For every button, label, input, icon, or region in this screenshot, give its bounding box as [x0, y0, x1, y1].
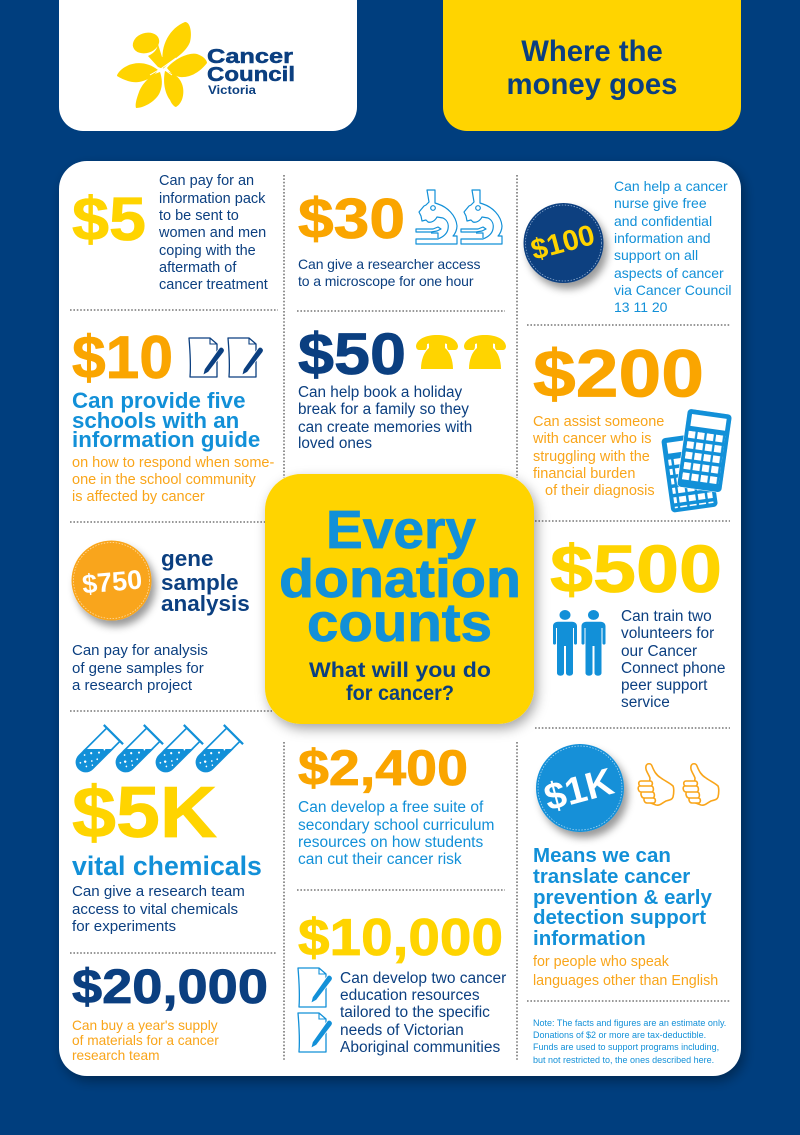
- icon: test tubes: [69, 725, 243, 779]
- block: $2,400: $2,400: [298, 740, 468, 796]
- block: $750: [72, 540, 250, 694]
- title: money goes: [507, 68, 677, 101]
- panel: header title: [443, 0, 741, 131]
- block: $500: volunteers for: [621, 625, 714, 642]
- panel: logo: [59, 0, 357, 131]
- panel: every donation counts: What will you do: [309, 659, 491, 682]
- block: $50: can create memories with: [298, 419, 472, 436]
- block: $5: information pack: [159, 191, 266, 207]
- block: $5: coping with the: [159, 243, 256, 259]
- block: $1K: for people who speak: [533, 954, 670, 970]
- block: $20,000: Can buy a year's supply: [72, 1018, 218, 1033]
- panel: every donation counts: [265, 474, 534, 724]
- block: $200: with cancer who is: [532, 431, 651, 447]
- note: Note: The facts and figures are an estimate only.: [533, 1018, 726, 1028]
- block: $2,400: can cut their cancer risk: [298, 851, 462, 868]
- block: $20,000: of materials for a cancer: [72, 1033, 219, 1048]
- block: $500: Connect phone: [621, 660, 725, 677]
- block: $5K: $5K: [72, 773, 217, 853]
- block: $750: Can pay for analysis: [72, 642, 208, 659]
- block: $1K: $1K: [540, 761, 619, 820]
- block: $5K: access to vital chemicals: [72, 901, 238, 918]
- block: $50: [298, 322, 506, 452]
- block: $10,000: $10,000: [298, 909, 503, 967]
- note: Funds are used to support programs including,: [533, 1042, 719, 1052]
- block: $200: of their diagnosis: [545, 483, 655, 499]
- panel: every donation counts: for cancer?: [346, 682, 454, 705]
- block: $30: $30: [298, 187, 405, 251]
- block: $10: Can provide five: [72, 388, 245, 413]
- block: $100: via Cancer Council: [614, 282, 732, 298]
- title: Where the: [521, 35, 663, 68]
- block: $500: Can train two: [621, 608, 712, 625]
- icon: daffodil: [117, 22, 207, 108]
- block: $100: support on all: [614, 247, 698, 263]
- block: $1K: detection support: [533, 906, 706, 929]
- block: $750: sample: [161, 570, 239, 595]
- block: $200: struggling with the: [533, 449, 650, 465]
- block: $5K: vital chemicals: [72, 851, 262, 881]
- block: $500: our Cancer: [621, 643, 697, 660]
- note: Donations of $2 or more are tax-deductible.: [533, 1030, 706, 1040]
- block: $100: aspects of cancer: [614, 265, 724, 281]
- block: $10,000: Aboriginal communities: [340, 1039, 500, 1056]
- block: $200: financial burden: [533, 466, 635, 482]
- icon: calculators: [661, 408, 732, 513]
- block: $100: 13 11 20: [614, 299, 668, 315]
- block: $2,400: resources on how students: [298, 834, 483, 851]
- block: $5: women and men: [158, 225, 266, 241]
- block: $50: loved ones: [298, 435, 372, 452]
- block: $30: to a microscope for one hour: [298, 273, 474, 289]
- block: $2,400: Can develop a free suite of: [298, 799, 484, 816]
- panel: every donation counts: counts: [307, 593, 492, 653]
- block: $5: cancer treatment: [159, 277, 268, 293]
- block: $10,000: Can develop two cancer: [340, 970, 506, 987]
- block: $5: to be sent to: [159, 208, 239, 224]
- logo wordmark: Cancer: [207, 46, 293, 68]
- icon: thumbs up: [638, 764, 719, 805]
- block: $100: information and: [614, 230, 711, 246]
- block: $10: on how to respond when some-: [72, 455, 274, 471]
- panel: main white card: [59, 161, 741, 1076]
- block: $5: [72, 173, 268, 293]
- block: $50: break for a family so they: [298, 401, 469, 418]
- block: $500: peer support: [621, 677, 708, 694]
- note: but not restricted to, the ones described here.: [533, 1055, 714, 1065]
- block: $200: Can assist someone: [533, 414, 664, 430]
- block: $10,000: tailored to the specific: [340, 1004, 490, 1021]
- block: $100: Can help a cancer: [614, 178, 728, 194]
- block: $500: service: [621, 694, 670, 711]
- block: $750: analysis: [161, 591, 250, 616]
- block: $10,000: needs of Victorian: [340, 1022, 464, 1039]
- block: $10: schools with an: [72, 408, 239, 433]
- block: $10,000: [298, 909, 506, 1056]
- block: $500: [550, 532, 725, 711]
- block: $100: [524, 178, 732, 315]
- block: $1K: prevention & early: [533, 886, 712, 909]
- icon: documents and pencils: [189, 338, 263, 377]
- block: $750: of gene samples for: [72, 660, 204, 677]
- block: $5: Can pay for an: [159, 173, 254, 189]
- block: $2,400: secondary school curriculum: [298, 817, 494, 834]
- logo wordmark: Victoria: [208, 85, 257, 97]
- panel: every donation counts: Every: [326, 500, 476, 560]
- icon: microscopes: [416, 190, 502, 244]
- block: $5K: [69, 725, 262, 935]
- block: $200: $200: [533, 336, 704, 412]
- block: $1K: information: [533, 927, 646, 950]
- block: $5: $5: [72, 185, 146, 253]
- block: $100: $100: [528, 219, 598, 267]
- block: $1K: Means we can: [533, 844, 671, 867]
- block: $10,000: education resources: [340, 987, 480, 1004]
- block: $30: [298, 187, 502, 289]
- block: $200: [532, 336, 732, 513]
- block: $750: a research project: [72, 677, 193, 694]
- block: $10: [72, 324, 274, 505]
- icon: documents and pencils: [298, 968, 332, 1052]
- icon: two people: [553, 610, 606, 676]
- logo wordmark: [207, 46, 295, 97]
- logo wordmark: Council: [207, 64, 295, 86]
- block: $1K: languages other than English: [533, 973, 718, 989]
- block: $1K: [533, 744, 719, 989]
- block: $750: $750: [81, 564, 143, 600]
- block: $10: information guide: [72, 427, 260, 452]
- block: $100: and confidential: [614, 213, 712, 229]
- icon: telephones: [416, 335, 506, 369]
- block: $20,000: [72, 961, 268, 1063]
- block: $5K: Can give a research team: [72, 883, 245, 900]
- block: $10: $10: [72, 324, 173, 391]
- block: $20,000: $20,000: [72, 961, 268, 1014]
- block: $50: Can help book a holiday: [298, 384, 462, 401]
- block: $2,400: [298, 740, 494, 868]
- block: $50: $50: [298, 322, 406, 387]
- block: $500: $500: [550, 532, 722, 607]
- panel: every donation counts: donation: [279, 549, 521, 609]
- block: $5: aftermath of: [159, 260, 237, 276]
- block: $750: gene: [161, 546, 214, 571]
- block: $100: nurse give free: [614, 195, 707, 211]
- block: $10: is affected by cancer: [72, 489, 205, 505]
- block: $20,000: research team: [72, 1048, 160, 1063]
- block: $5K: for experiments: [72, 918, 176, 935]
- block: $10: one in the school community: [72, 472, 257, 488]
- block: $30: Can give a researcher access: [298, 256, 480, 272]
- block: $1K: translate cancer: [533, 865, 690, 888]
